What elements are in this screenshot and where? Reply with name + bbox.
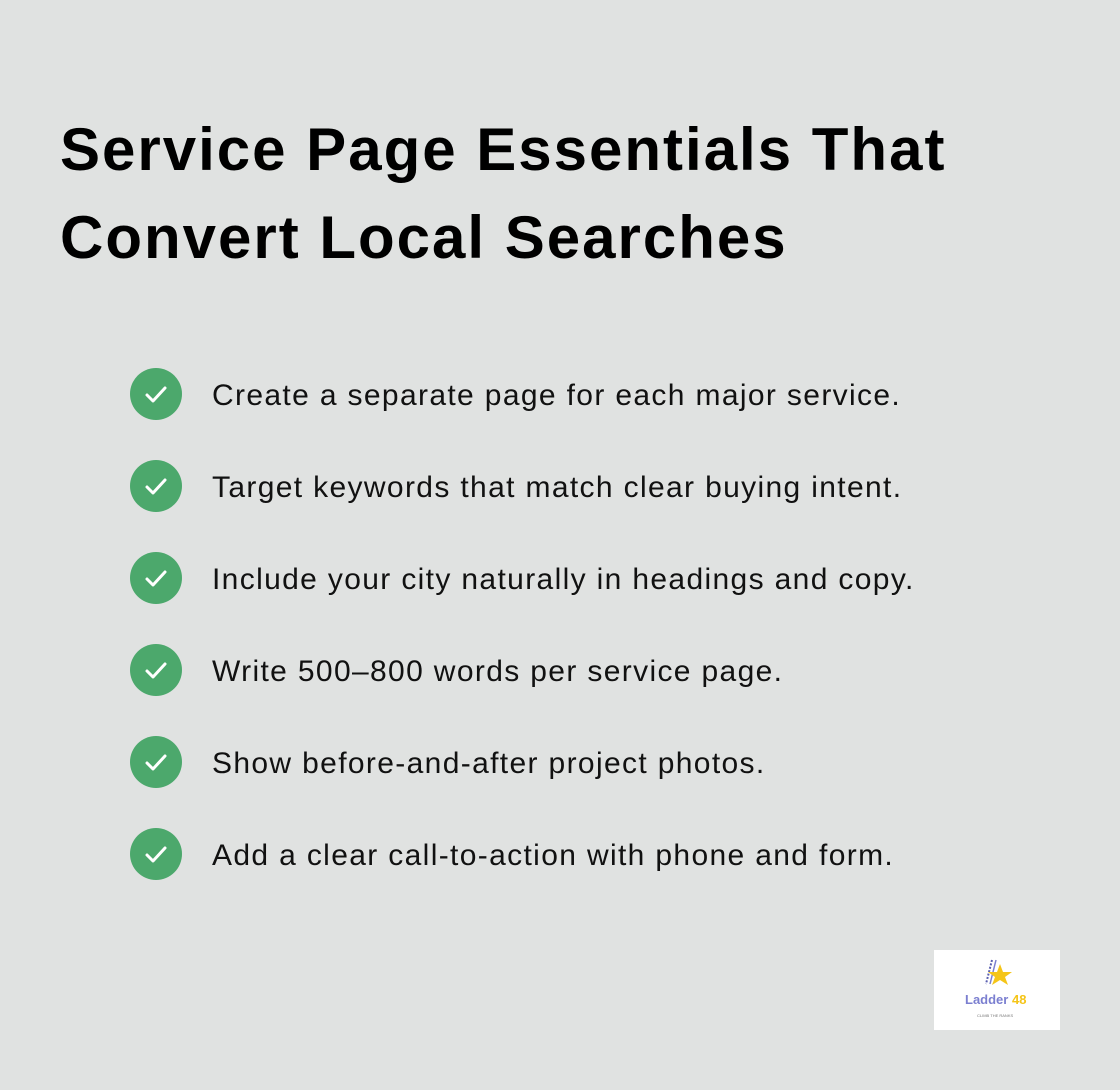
item 6: Add a clear call-to-action with phone and form.	[212, 839, 894, 872]
title: Convert Local Searches	[60, 204, 788, 271]
item 4: Write 500–800 words per service page.	[212, 655, 783, 688]
logo: CLIMB THE RANKS	[977, 1013, 1013, 1018]
item 1	[130, 368, 901, 420]
item 5	[130, 736, 766, 788]
item 4	[130, 644, 783, 696]
checklist	[130, 368, 915, 880]
item 2: Target keywords that match clear buying intent.	[212, 471, 902, 504]
item 2	[130, 460, 902, 512]
logo	[934, 950, 1060, 1030]
item 5: Show before-and-after project photos.	[212, 747, 766, 780]
title	[60, 116, 946, 271]
item 6	[130, 828, 894, 880]
item 3: Include your city naturally in headings and copy.	[212, 563, 915, 596]
item 1: Create a separate page for each major service.	[212, 379, 901, 412]
item 3	[130, 552, 915, 604]
logo: Ladder 48	[965, 992, 1026, 1007]
title: Service Page Essentials That	[60, 116, 946, 183]
